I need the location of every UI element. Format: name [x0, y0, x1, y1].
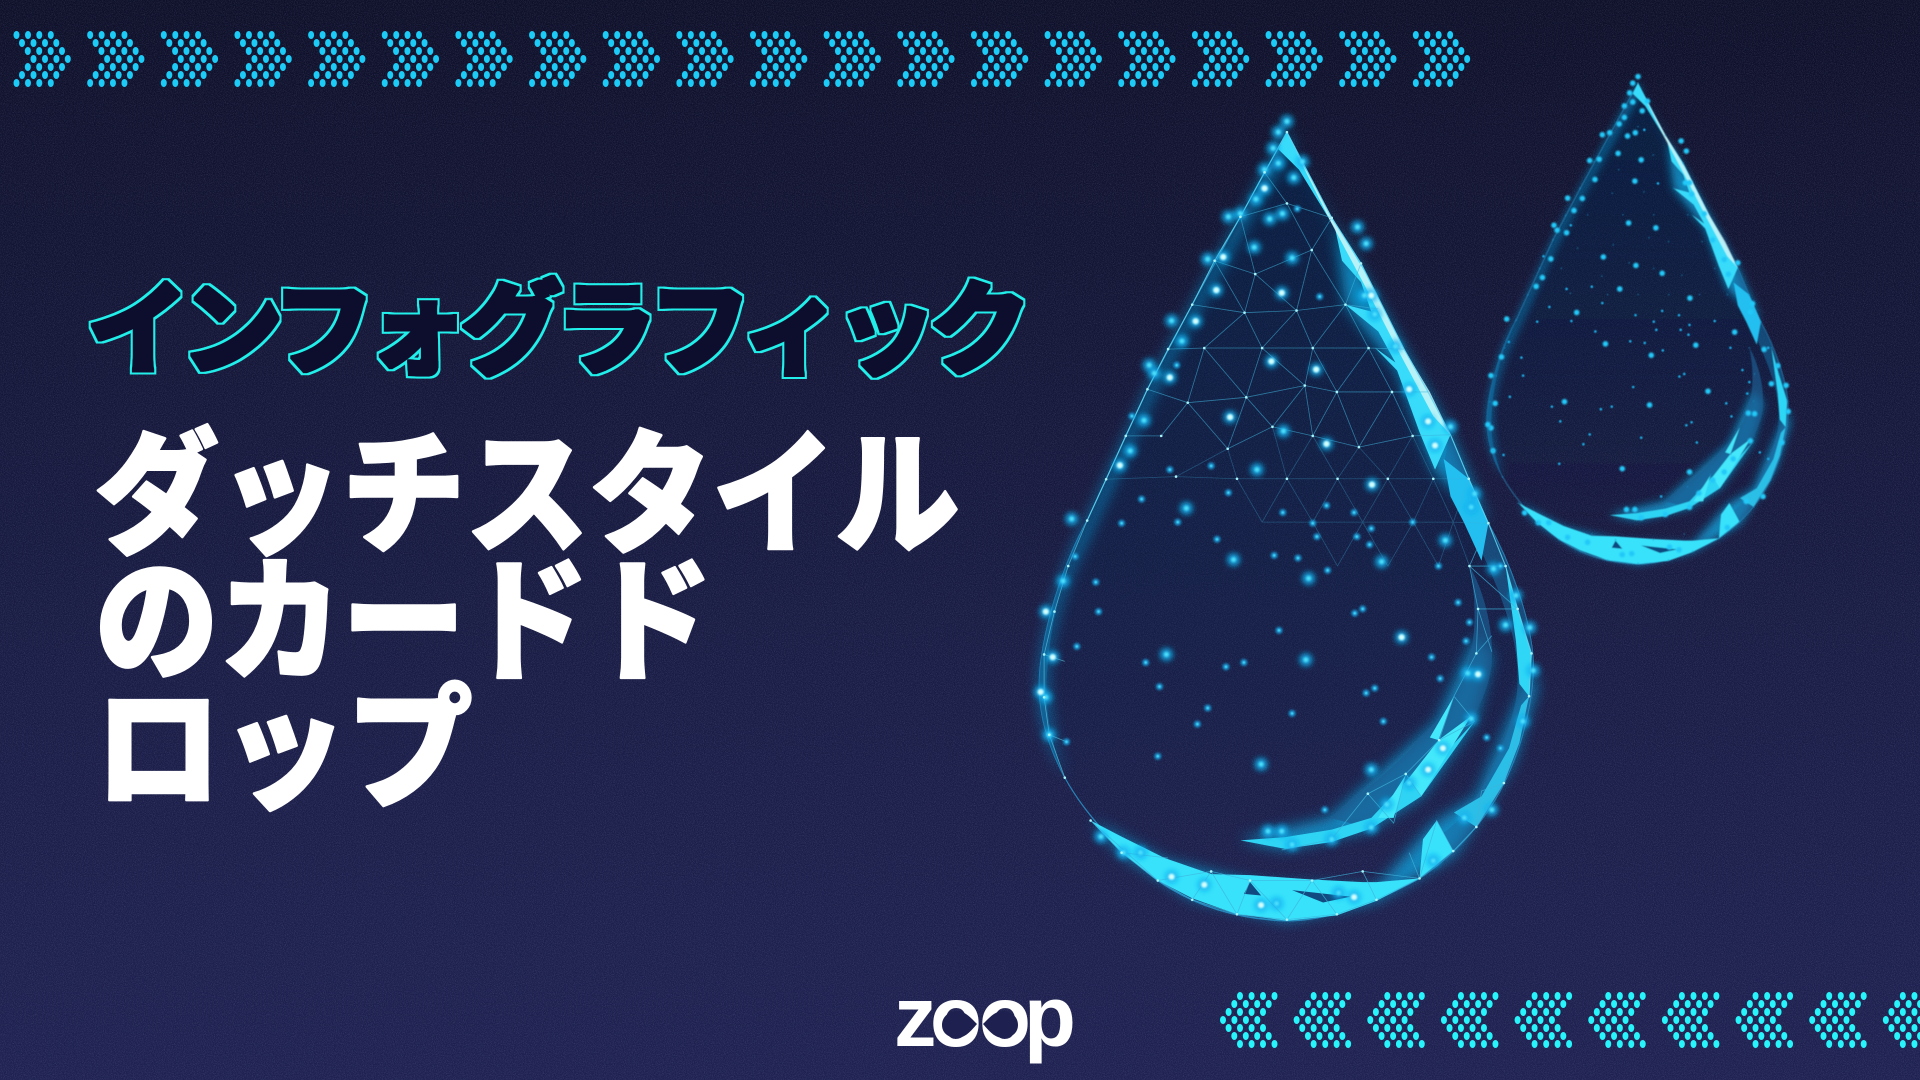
- title line 3: ロップ: [95, 675, 473, 826]
- arrow row: top right-pointing dotted chevrons: [14, 31, 1470, 87]
- water drop: small, back: [1487, 77, 1790, 564]
- logo: zoop: [894, 970, 1076, 1065]
- large drop polygon mesh: [1044, 132, 1531, 920]
- logo infinity crossing: [942, 1011, 1018, 1038]
- logo wordmark: zoop: [894, 970, 1076, 1065]
- title line 2: のカードド: [95, 548, 712, 698]
- main title: [95, 421, 959, 826]
- title line 1: ダッチスタイル: [95, 421, 959, 571]
- small drop light points: [1488, 77, 1788, 563]
- large drop glowing bands: [1039, 132, 1537, 921]
- arrow row: bottom left-pointing dotted chevrons: [1220, 992, 1920, 1048]
- water drop: large, front: [1039, 121, 1537, 921]
- small drop glowing bands: [1487, 83, 1790, 564]
- subtitle: outlined cyan: インフォグラフィック: [87, 274, 1023, 388]
- large drop light points: [1041, 121, 1533, 920]
